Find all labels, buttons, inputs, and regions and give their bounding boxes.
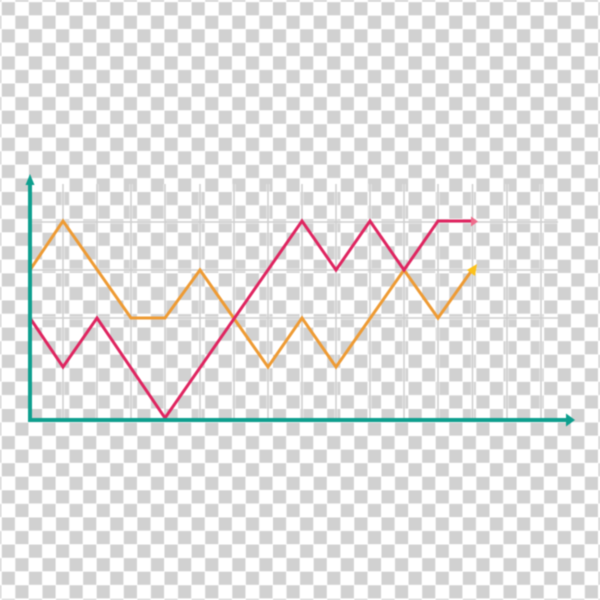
y axis with arrow: [26, 174, 34, 422]
x axis with arrow: [28, 414, 575, 426]
icon: yellow arrowhead: [467, 264, 477, 276]
chart axes: [26, 174, 575, 426]
chart grid lines: [30, 184, 558, 418]
orange data line: [30, 221, 477, 367]
pink data line: [30, 216, 478, 418]
icon: pink arrowhead: [471, 216, 478, 226]
